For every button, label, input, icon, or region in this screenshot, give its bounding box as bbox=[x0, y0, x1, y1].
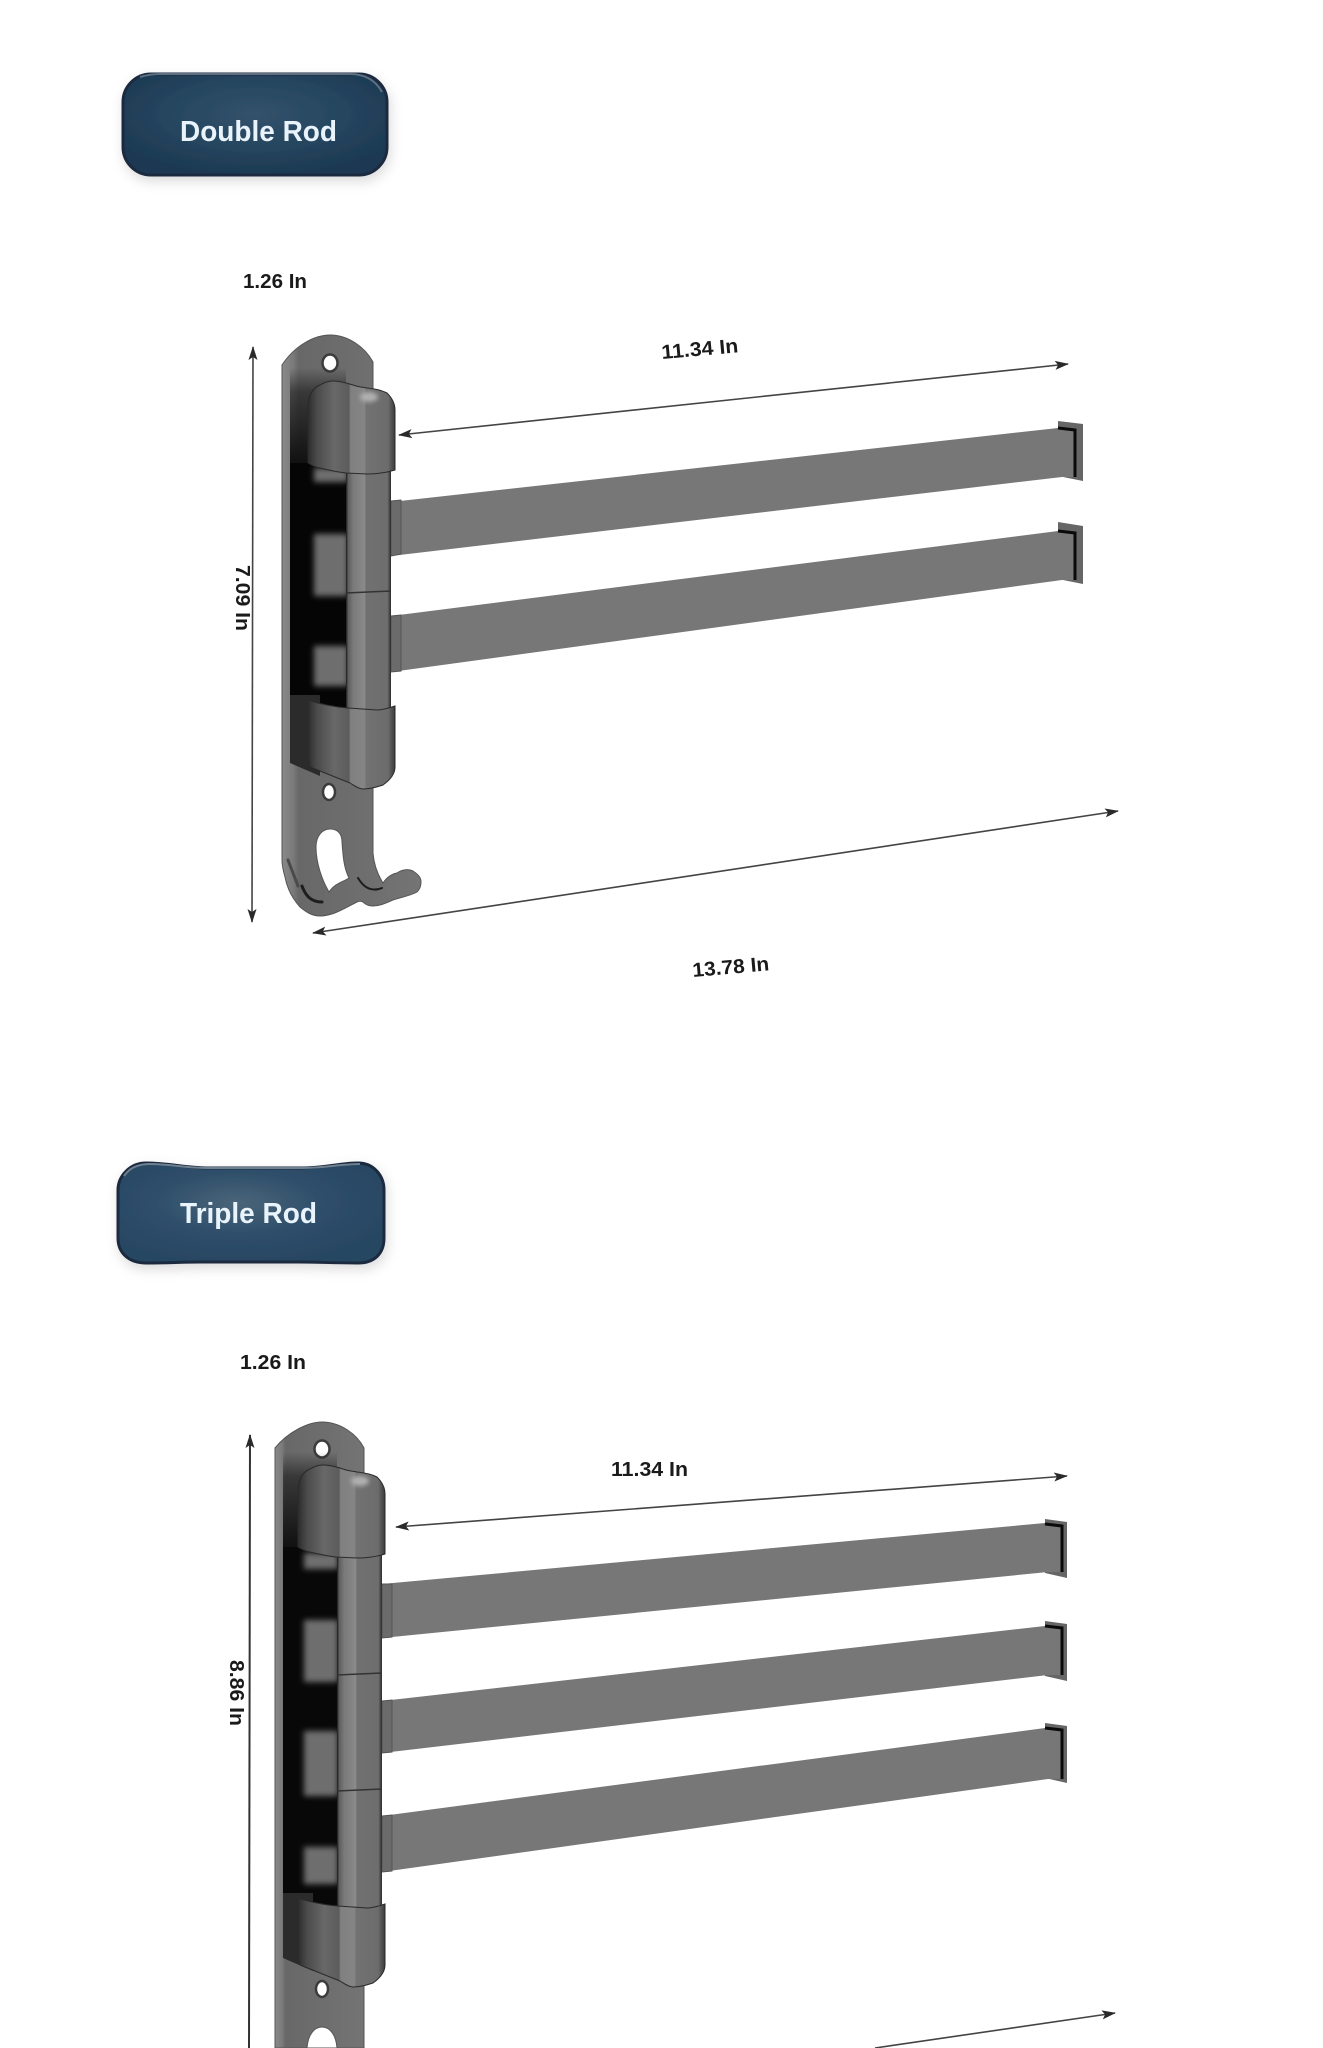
arrow: rod length 11.34 In bbox=[399, 364, 1068, 435]
label: 11.34 In: 11.34 In bbox=[611, 1459, 688, 1481]
arrow: overall length bbox=[875, 2013, 1115, 2048]
heading badge: Double Rod bbox=[123, 74, 387, 175]
rod 2 collar bbox=[391, 615, 401, 672]
lower mounting hole bbox=[316, 1981, 328, 1997]
rod 2 bbox=[382, 1626, 1062, 1753]
hinge column bbox=[346, 470, 391, 710]
arrow: overall length 13.78 In bbox=[313, 811, 1118, 933]
rod 2 end cap edge bbox=[1045, 1626, 1062, 1675]
label: width 1.26 In: 1.26 In bbox=[243, 271, 307, 293]
recessed dark channel bbox=[283, 1547, 338, 1915]
lower hinge cap bbox=[308, 700, 395, 789]
arrow: height 7.09 In: 7.09 In bbox=[231, 565, 253, 631]
rod 2 end cap edge bbox=[1058, 531, 1075, 580]
rod 3 bbox=[382, 1728, 1062, 1872]
mounting plate with hooks bbox=[282, 335, 421, 916]
rod 2 end cap bbox=[1058, 522, 1083, 584]
rod 1 collar bbox=[382, 1584, 392, 1638]
rod 3 collar bbox=[382, 1815, 392, 1872]
rod 1 end cap edge bbox=[1058, 428, 1075, 477]
rod 1 end cap edge bbox=[1045, 1524, 1062, 1572]
label: 11.34 In: 11.34 In bbox=[661, 335, 739, 364]
channel highlights bbox=[304, 1553, 338, 1884]
mounting plate bbox=[275, 1422, 364, 2048]
rod 1 bbox=[382, 1523, 1062, 1638]
recessed dark channel bbox=[290, 463, 348, 713]
shadow above recess bbox=[290, 368, 346, 464]
heading badge: Double Rod: Double Rod bbox=[180, 116, 337, 148]
hook shading bbox=[288, 860, 382, 902]
column seam bbox=[346, 591, 391, 593]
upper hinge cap bbox=[298, 1465, 385, 1558]
shadow above recess bbox=[283, 1452, 337, 1548]
lower hinge cap bbox=[298, 1898, 385, 1987]
double rod towel rack bbox=[282, 335, 1083, 916]
upper rod 1 collar bbox=[391, 500, 401, 556]
lower mounting hole bbox=[323, 784, 335, 800]
rod 1 end cap bbox=[1045, 1519, 1067, 1578]
rod 2 end cap bbox=[1045, 1621, 1067, 1681]
label: width 1.26 In: 1.26 In bbox=[240, 1352, 306, 1374]
upper hinge cap bbox=[308, 381, 395, 474]
rod 2 bbox=[391, 531, 1075, 672]
channel highlights bbox=[314, 468, 348, 686]
hinge column bbox=[337, 1553, 382, 1911]
rod 3 end cap edge bbox=[1045, 1728, 1062, 1779]
heading badge: Triple Rod: Triple Rod bbox=[180, 1198, 317, 1230]
heading badge: Triple Rod bbox=[118, 1163, 384, 1263]
top mounting hole bbox=[314, 1440, 330, 1458]
triple rod towel rack bbox=[275, 1422, 1067, 2048]
rod 3 end cap bbox=[1045, 1723, 1067, 1783]
rod 2 collar bbox=[382, 1700, 392, 1753]
rod 1 end cap bbox=[1058, 421, 1083, 481]
column seams bbox=[337, 1673, 382, 1791]
arrow: height 8.86 In: 8.86 In bbox=[225, 1660, 247, 1726]
top mounting hole bbox=[322, 354, 338, 372]
upper rod 1 bbox=[391, 428, 1075, 556]
arrow: rod length 11.34 In bbox=[396, 1476, 1067, 1527]
label: 13.78 In: 13.78 In bbox=[692, 953, 770, 982]
